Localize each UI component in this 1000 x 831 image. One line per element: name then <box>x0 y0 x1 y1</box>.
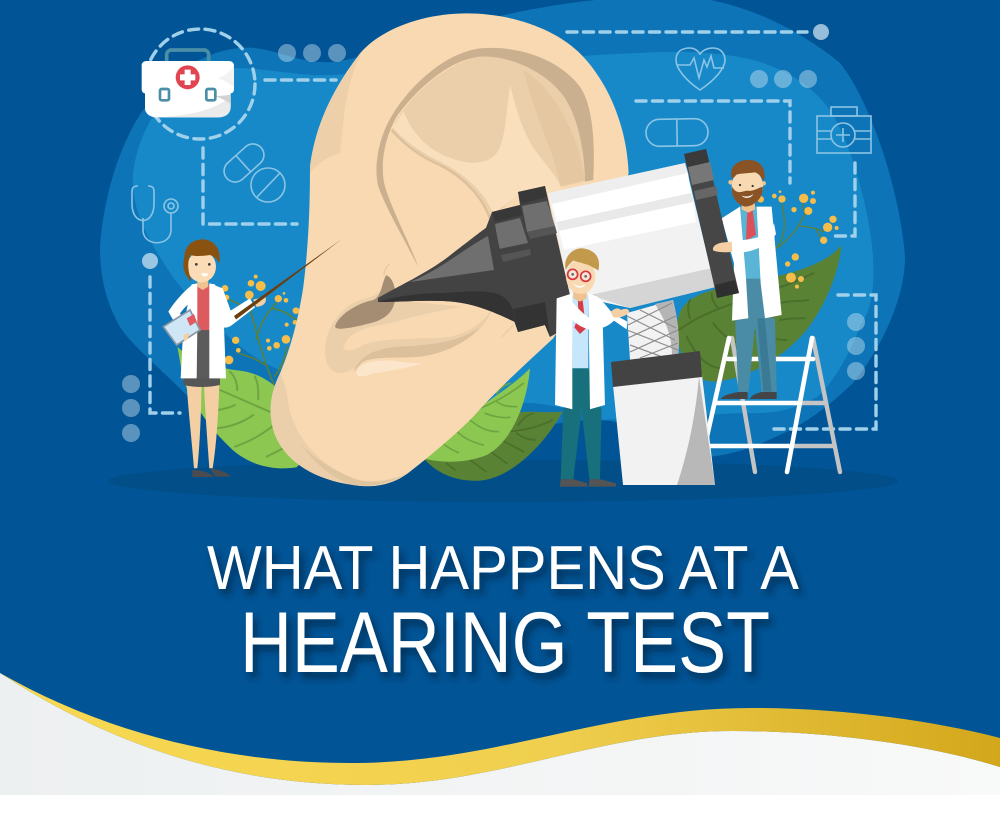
shoes <box>192 468 231 477</box>
clipboard <box>163 310 200 345</box>
icon: outlined medical kit <box>817 107 871 153</box>
otoscope body <box>548 163 715 308</box>
decorative dots <box>122 24 865 442</box>
icon: stethoscope <box>132 186 178 243</box>
legs <box>187 385 202 468</box>
doctor with pointer <box>163 239 266 477</box>
stand mesh <box>627 300 679 360</box>
young doctor with glasses <box>555 248 629 487</box>
title: HEARING TEST <box>240 595 770 691</box>
icon: capsule outline <box>646 118 708 147</box>
shirt <box>740 207 763 280</box>
neck and head <box>742 200 755 213</box>
doctor with beard: body <box>721 160 782 399</box>
neck and head <box>197 278 208 290</box>
bottom wave: grey band <box>0 673 1000 795</box>
trousers <box>561 368 602 479</box>
otoscope <box>378 149 739 337</box>
backdrop blob: mid blue <box>100 0 905 457</box>
doctor with beard: arm and hand <box>713 223 776 253</box>
arm <box>559 296 627 329</box>
icon: heart monitor <box>676 48 725 90</box>
icon: pills <box>220 139 285 202</box>
shoes <box>560 479 616 487</box>
title: WHAT HAPPENS AT A <box>207 534 800 603</box>
dashed connectors <box>145 29 876 429</box>
ground shadow ellipse <box>108 460 898 502</box>
ear <box>270 13 629 486</box>
right arm <box>214 285 255 328</box>
backdrop blob: light blue <box>133 52 873 420</box>
left leaf and flower branch <box>177 275 310 468</box>
dark hump at foot of scene <box>430 420 720 478</box>
ladder <box>704 338 840 472</box>
bottom wave: gold ribbon <box>0 673 1000 785</box>
icon: white medical kit <box>142 50 234 117</box>
otoscope end cap <box>684 149 739 298</box>
blouse <box>197 285 210 330</box>
right flower branch <box>757 190 839 289</box>
coat <box>722 207 748 321</box>
dark green leaf, right side <box>677 245 842 382</box>
stand base <box>611 351 715 485</box>
shirt <box>572 295 588 368</box>
left arm <box>168 284 195 337</box>
title <box>207 534 800 691</box>
skirt <box>183 377 220 387</box>
otoscope cone <box>378 222 515 322</box>
leaves under the ear lobe <box>423 368 563 481</box>
tie <box>574 300 586 334</box>
trousers <box>735 318 777 393</box>
coat <box>555 293 572 409</box>
tie <box>746 210 756 241</box>
head <box>573 290 587 302</box>
shoes <box>721 392 777 399</box>
otoscope collar <box>470 186 580 337</box>
pointer stick <box>234 239 342 320</box>
coat <box>181 283 197 378</box>
